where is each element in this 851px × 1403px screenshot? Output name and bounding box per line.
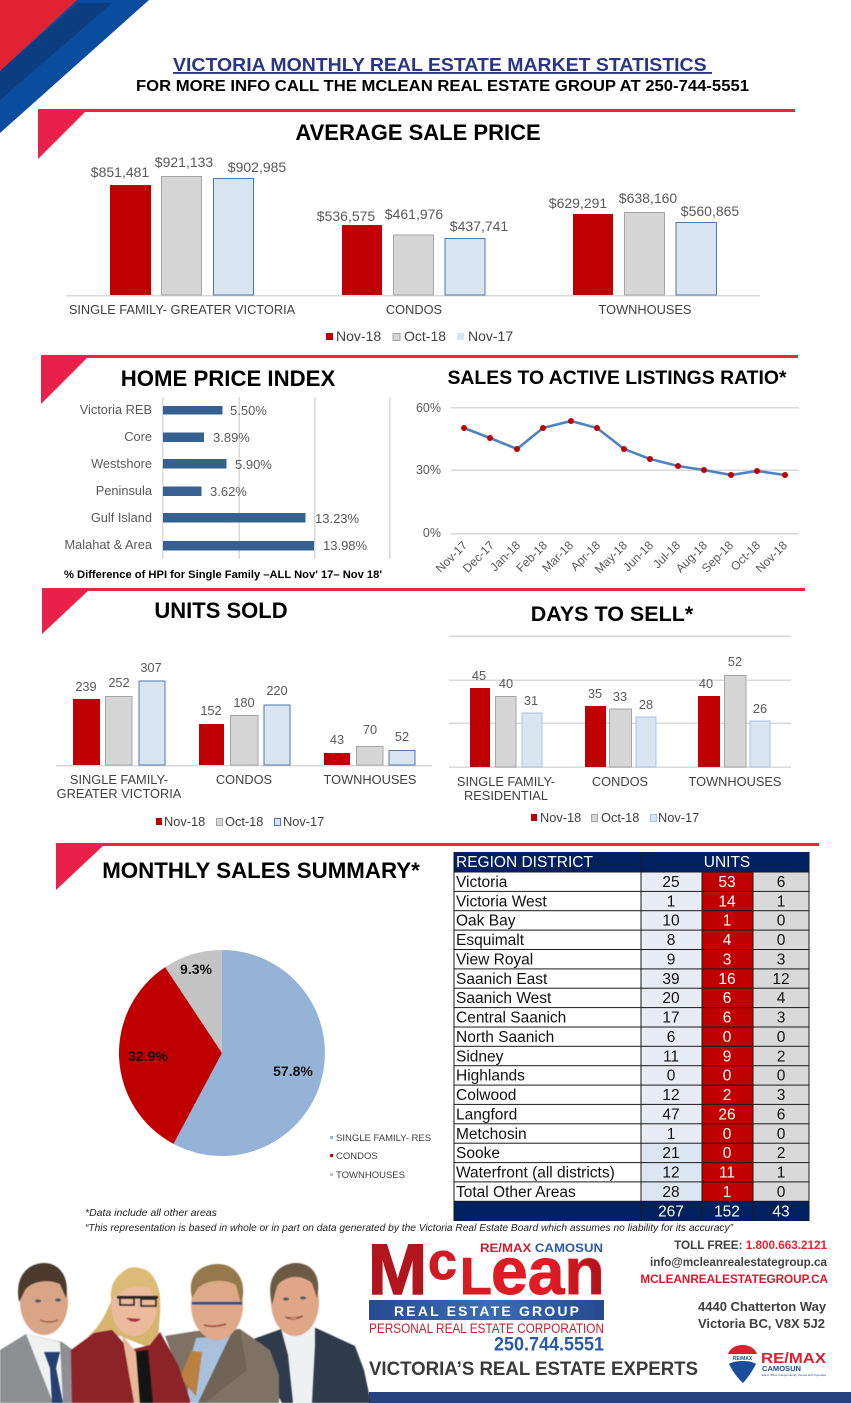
bar chart: days to sell: 31 (524, 693, 538, 708)
line chart: sales to active listings ratio: Jan-18 (487, 538, 523, 574)
footer bar (369, 1392, 851, 1403)
logo: RE/MAX balloon: Each Office Independently Owned and Operated (762, 1373, 826, 1377)
row: Metchosin: 0 (723, 1126, 732, 1143)
bar chart: home price index: 5.90% (235, 457, 272, 472)
contact details (640, 1239, 829, 1286)
bar chart: units sold (56, 660, 432, 801)
bar chart: average sale price: TOWNHOUSES (599, 302, 691, 317)
address: Victoria BC, V8X 5J2 (698, 1316, 825, 1331)
bar chart: days to sell: 33 (613, 689, 627, 704)
row: Langford: 26 (718, 1106, 736, 1123)
address: 4440 Chatterton Way (698, 1299, 827, 1314)
bar chart: units sold: 307 (140, 660, 162, 675)
line chart: sales to active listings ratio: Mar-18 (539, 538, 576, 575)
row: Saanich West: Saanich West (456, 990, 552, 1007)
panel: units sold (42, 588, 805, 829)
footnotes (85, 1207, 733, 1234)
line chart: sales to active listings ratio (416, 401, 799, 576)
row: Victoria: 25 (662, 874, 680, 891)
line chart: sales to active listings ratio: Nov-17 (433, 538, 470, 575)
tagline: VICTORIA’S REAL ESTATE EXPERTS (369, 1358, 698, 1380)
bar chart: average sale price: $851,481 (91, 164, 149, 180)
bar chart: units sold: 52 (395, 729, 409, 744)
legend: days to sell: Oct-18 (601, 810, 639, 825)
logo: McLean (368, 1231, 605, 1356)
row: North Saanich: 0 (723, 1029, 732, 1046)
legend: pie chart: TOWNHOUSES (336, 1170, 405, 1181)
logo: McLean: L (460, 1248, 492, 1306)
bar chart: days to sell: RESIDENTIAL (464, 788, 548, 803)
corner banner (0, 0, 149, 133)
row: Sooke: 0 (723, 1145, 732, 1162)
row: Highlands: 0 (777, 1068, 786, 1085)
legend: units sold: Nov-17 (283, 814, 324, 829)
footnotes: *Data include all other areas (85, 1207, 218, 1219)
panel: sales to active listings ratio (416, 367, 799, 576)
bar chart: units sold: 70 (363, 722, 377, 737)
bar chart: home price index (64, 397, 390, 559)
bar chart: units sold: SINGLE FAMILY- (70, 772, 168, 787)
bar chart: average sale price: $437,741 (450, 218, 508, 234)
bar chart: days to sell: 45 (472, 668, 486, 683)
row: Esquimalt: Esquimalt (456, 932, 525, 949)
line chart: sales to active listings ratio: Nov-18 (753, 538, 790, 575)
row: Colwood: Colwood (456, 1087, 516, 1104)
logo: McLean: 250.744.5551 (494, 1334, 604, 1356)
logo: RE/MAX balloon (728, 1345, 826, 1383)
row: Saanich East: 39 (662, 971, 680, 988)
bar chart: home price index: Westshore (91, 456, 152, 471)
bar chart: units sold: 43 (330, 732, 344, 747)
row: Waterfront: 12 (662, 1165, 680, 1182)
line chart: sales to active listings ratio: 0% (423, 526, 441, 540)
row: Central Saanich: 6 (723, 1010, 731, 1027)
contact details: TOLL FREE: 1.800.663.2121 (674, 1239, 827, 1252)
bar chart: home price index: Gulf Island (91, 510, 152, 525)
row: Waterfront: 11 (719, 1165, 735, 1182)
row: Esquimalt: 4 (723, 932, 732, 949)
row: Sidney: 9 (723, 1048, 731, 1065)
table header: REGION DISTRICT (456, 854, 593, 871)
row: totals: 267 (658, 1204, 684, 1220)
bar chart: days to sell: 35 (588, 686, 602, 701)
row: View Royal: 3 (777, 952, 785, 968)
row: Colwood (456, 1087, 785, 1104)
legend: average sale price (326, 328, 513, 344)
row: Highlands (456, 1068, 786, 1085)
bar chart: average sale price: $560,865 (681, 203, 739, 219)
legend: average sale price: Nov-17 (468, 328, 513, 344)
legend: days to sell: Nov-18 (540, 810, 581, 825)
row: Central Saanich: 3 (777, 1010, 785, 1027)
bar chart: average sale price: $536,575 (317, 208, 375, 224)
heading: sales to active listings ratio: SALES TO ACTIVE LISTINGS RATIO* (448, 367, 787, 389)
bar chart: home price index: Victoria REB (80, 402, 152, 417)
row: Central Saanich: 17 (662, 1010, 680, 1027)
legend: days to sell: Nov-17 (658, 810, 699, 825)
heading: home price index: HOME PRICE INDEX (121, 366, 335, 391)
row: Victoria: 6 (777, 874, 785, 891)
row: Central Saanich: Central Saanich (456, 1010, 566, 1027)
logo: McLean: ean (491, 1234, 605, 1308)
bar chart: days to sell: TOWNHOUSES (689, 774, 781, 789)
bar chart: home price index: 13.98% (323, 538, 368, 553)
row: Victoria West: 14 (718, 893, 736, 910)
bar chart: units sold: GREATER VICTORIA (57, 786, 182, 801)
bar chart: days to sell: 40 (499, 676, 513, 691)
row: Oak Bay (456, 913, 786, 930)
bar chart: average sale price: $629,291 (549, 195, 607, 211)
logo: McLean: REAL ESTATE GROUP (394, 1303, 579, 1319)
row: Saanich East: Saanich East (456, 971, 548, 988)
bar chart: average sale price: SINGLE FAMILY- GREATER VICTORIA (69, 302, 296, 317)
table header (456, 854, 750, 871)
bar chart: average sale price: $921,133 (155, 154, 213, 170)
row: Oak Bay: Oak Bay (456, 913, 516, 930)
legend: units sold: Oct-18 (225, 814, 263, 829)
row: North Saanich: North Saanich (456, 1029, 554, 1046)
row: Highlands: 0 (723, 1068, 732, 1085)
table header: UNITS (704, 854, 750, 871)
row: Langford: Langford (456, 1106, 517, 1123)
row: totals (658, 1204, 790, 1220)
row: Highlands: 0 (667, 1068, 676, 1085)
bar chart: days to sell (449, 636, 791, 803)
row: Oak Bay: 0 (777, 913, 786, 930)
row: Oak Bay: 10 (662, 913, 680, 930)
bar chart: average sale price: $461,976 (385, 206, 443, 222)
panel: days to sell (449, 602, 791, 825)
bar chart: home price index: 3.62% (210, 484, 247, 499)
line chart: sales to active listings ratio: Jul-18 (650, 538, 683, 571)
legend: average sale price: Oct-18 (404, 328, 446, 344)
logo: McLean: RE/MAX CAMOSUN (480, 1241, 603, 1255)
contact details: info@mcleanrealestategroup.ca (650, 1256, 827, 1269)
row: Esquimalt: 0 (777, 932, 786, 949)
heading: units sold: UNITS SOLD (154, 598, 288, 623)
row: Sooke: 2 (777, 1145, 785, 1162)
bar chart: home price index: Core (124, 429, 152, 444)
pie chart: sales share: 32.9% (128, 1048, 168, 1064)
row: View Royal: 9 (667, 952, 675, 968)
heading: average sale price: AVERAGE SALE PRICE (295, 120, 541, 145)
bar chart: units sold: TOWNHOUSES (324, 772, 416, 787)
line chart: sales to active listings ratio: Dec-17 (460, 538, 497, 575)
legend: pie chart: SINGLE FAMILY- RES (336, 1133, 431, 1144)
row: Victoria: 53 (718, 874, 736, 891)
row: totals: 43 (772, 1204, 790, 1220)
bar chart: home price index: 3.89% (213, 430, 250, 445)
person 4 (248, 1263, 371, 1403)
title (136, 54, 749, 95)
panel: monthly sales summary (56, 843, 819, 1181)
row: North Saanich: 6 (667, 1029, 675, 1046)
logo: McLean: M (368, 1231, 427, 1310)
row: Sidney: Sidney (456, 1048, 504, 1065)
row: Saanich East: 16 (718, 971, 736, 988)
row: Saanich East: 12 (772, 971, 790, 988)
person 1 (0, 1263, 73, 1403)
legend: pie chart: CONDOS (336, 1151, 378, 1162)
row: Metchosin: 0 (777, 1126, 786, 1143)
row: Langford: 47 (662, 1106, 680, 1123)
bar chart: home price index: 5.50% (230, 403, 267, 418)
line chart: sales to active listings ratio: 60% (416, 401, 441, 415)
legend: pie chart (330, 1133, 431, 1181)
bar chart: days to sell: CONDOS (592, 774, 648, 789)
row: View Royal (456, 952, 785, 968)
row: Langford (456, 1106, 785, 1123)
row: Victoria West (456, 893, 785, 910)
legend: units sold (156, 814, 324, 829)
row: North Saanich (456, 1029, 786, 1046)
row: Colwood: 3 (777, 1087, 785, 1104)
line chart: sales to active listings ratio: Feb-18 (513, 538, 550, 575)
row: Total Other Areas: 0 (777, 1184, 786, 1201)
row: View Royal: 3 (723, 952, 731, 968)
bar chart: days to sell: 40 (699, 676, 713, 691)
row: Metchosin: Metchosin (456, 1126, 527, 1143)
line chart: sales to active listings ratio: Sep-18 (699, 538, 736, 575)
bar chart: average sale price (66, 154, 760, 317)
row: Metchosin (456, 1126, 786, 1143)
row: Sooke: Sooke (456, 1145, 500, 1162)
row: Victoria (456, 874, 785, 891)
title: FOR MORE INFO CALL THE MCLEAN REAL ESTATE GROUP AT 250-744-5551 (136, 78, 749, 95)
logo: McLean: PERSONAL REAL ESTATE CORPORATION (369, 1321, 604, 1336)
title: VICTORIA MONTHLY REAL ESTATE MARKET STATISTICS (173, 54, 712, 75)
row: Total Other Areas: Total Other Areas (456, 1184, 576, 1201)
legend: units sold: Nov-18 (164, 814, 205, 829)
row: Total Other Areas: 28 (662, 1184, 680, 1201)
heading: days to sell: DAYS TO SELL* (531, 602, 694, 626)
logo: RE/MAX balloon: CAMOSUN (762, 1364, 801, 1373)
bar chart: home price index: 13.23% (315, 511, 360, 526)
bar chart: average sale price: CONDOS (386, 302, 442, 317)
team photo (0, 1263, 371, 1403)
bar chart: home price index: Peninsula (96, 483, 153, 498)
pie chart: sales share: 9.3% (180, 961, 213, 977)
bar chart: days to sell: SINGLE FAMILY- (457, 774, 555, 789)
line chart: sales to active listings ratio: May-18 (592, 538, 630, 576)
pie chart: sales share: 57.8% (273, 1063, 313, 1079)
line chart: sales to active listings ratio: Apr-18 (568, 538, 603, 574)
address (698, 1299, 827, 1331)
row: Victoria: Victoria (456, 874, 508, 891)
heading: monthly sales summary: MONTHLY SALES SUMMARY* (102, 858, 420, 883)
row: Victoria West: 1 (777, 893, 785, 910)
row: Colwood: 12 (662, 1087, 680, 1104)
logo: RE/MAX balloon: RE/MAX (761, 1350, 826, 1367)
bar chart: units sold: 252 (108, 675, 130, 690)
caption: HPI note: % Difference of HPI for Single Family –ALL Nov' 17– Nov 18' (64, 569, 382, 581)
bar chart: units sold: 239 (75, 679, 97, 694)
line chart: sales to active listings ratio: 30% (416, 463, 441, 477)
contact details: MCLEANREALESTATEGROUP.CA (640, 1273, 829, 1286)
row: Oak Bay: 1 (723, 913, 731, 930)
legend: average sale price: Nov-18 (336, 328, 381, 344)
row: Langford: 6 (777, 1106, 785, 1123)
bar chart: units sold: CONDOS (216, 772, 272, 787)
row: Sidney: 2 (777, 1048, 785, 1065)
line chart: sales to active listings ratio: Oct-18 (728, 538, 763, 574)
bar chart: average sale price: $638,160 (619, 190, 677, 206)
table: region district units (454, 852, 810, 1221)
row: Saanich West: 6 (723, 990, 731, 1007)
row: totals: 152 (714, 1204, 740, 1220)
row: Saanich East (456, 971, 790, 988)
panel: home price index (41, 355, 798, 581)
line chart: sales to active listings ratio: Jun-18 (620, 538, 656, 574)
bar chart: days to sell: 52 (728, 654, 742, 669)
row: Saanich West (456, 990, 786, 1007)
panel: average sale price (38, 109, 795, 344)
row: Colwood: 2 (723, 1087, 731, 1104)
row: Total Other Areas (456, 1184, 786, 1201)
row: Waterfront: 1 (777, 1165, 785, 1182)
row: North Saanich: 0 (777, 1029, 786, 1046)
row: Total Other Areas: 1 (723, 1184, 731, 1201)
bar chart: units sold: 152 (200, 703, 222, 718)
person 3 (165, 1264, 279, 1403)
bar chart: home price index: Malahat & Area (64, 537, 153, 552)
row: Central Saanich (456, 1010, 785, 1027)
bar chart: average sale price: $902,985 (228, 159, 286, 175)
bar chart: days to sell: 28 (639, 697, 653, 712)
row: Esquimalt (456, 932, 786, 949)
row: Saanich West: 4 (777, 990, 786, 1007)
row: Esquimalt: 8 (667, 932, 675, 949)
logo: McLean: c (428, 1233, 457, 1291)
row: View Royal: View Royal (456, 952, 533, 968)
legend: days to sell (531, 810, 699, 825)
line chart: sales to active listings ratio: Aug-18 (673, 538, 710, 575)
person 2 (71, 1267, 190, 1403)
row: Waterfront: Waterfront (all districts) (456, 1165, 615, 1182)
bar chart: units sold: 180 (233, 695, 255, 710)
row: Saanich West: 20 (662, 990, 680, 1007)
footnotes: “This representation is based in whole or in part on data generated by the Victoria Real Estate Board which assumes no liability for its accuracy” (85, 1222, 733, 1234)
row: Sidney: 11 (663, 1048, 679, 1065)
row: Victoria West: Victoria West (456, 893, 547, 910)
row: Sooke: 21 (662, 1145, 680, 1162)
pie chart: sales share (119, 950, 325, 1156)
row: Sidney (456, 1048, 785, 1065)
row: Victoria West: 1 (667, 893, 675, 910)
row: Waterfront (456, 1165, 785, 1182)
logo: RE/MAX balloon: RE/MAX (733, 1356, 753, 1362)
row: Metchosin: 1 (667, 1126, 675, 1143)
row: Highlands: Highlands (456, 1068, 525, 1085)
row: Sooke (456, 1145, 785, 1162)
bar chart: days to sell: 26 (753, 701, 767, 716)
bar chart: units sold: 220 (266, 683, 288, 698)
